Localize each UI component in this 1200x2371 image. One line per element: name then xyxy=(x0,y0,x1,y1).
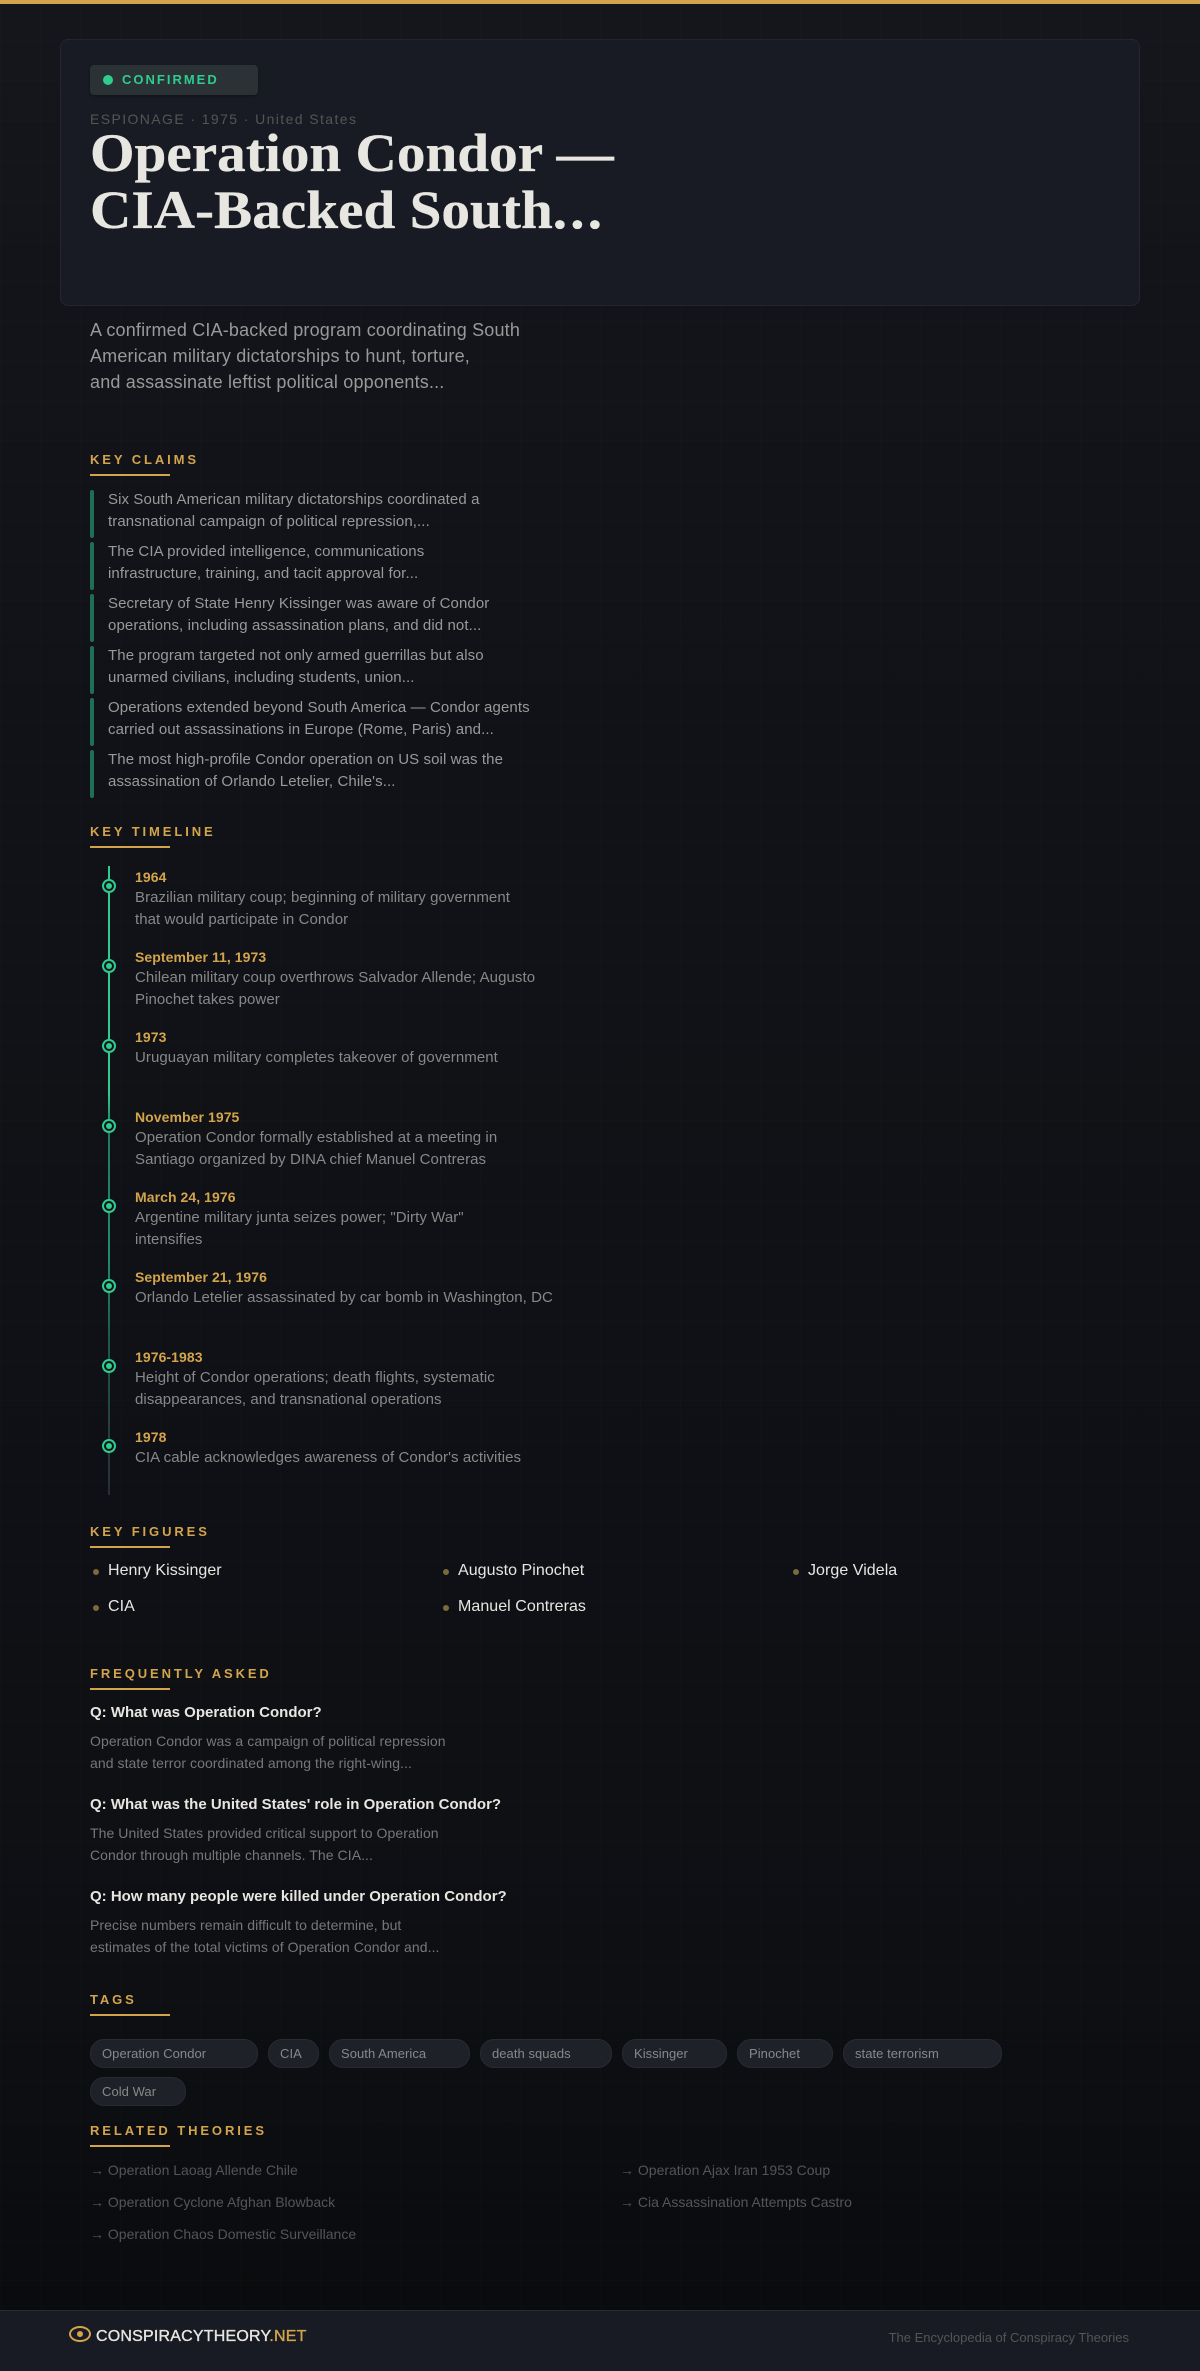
tag xyxy=(90,2077,186,2106)
claim 5 xyxy=(90,698,530,746)
claim 4: unarmed civilians, including students, union... xyxy=(108,669,415,686)
badge label: CONFIRMED xyxy=(122,72,219,87)
FAQ 1: Q: What was Operation Condor? xyxy=(90,1704,322,1721)
claim 5: carried out assassinations in Europe (Rome, Paris) and... xyxy=(108,721,494,738)
icon: status dot xyxy=(103,75,113,85)
heading: key claims: KEY CLAIMS xyxy=(90,452,199,467)
event September 21, 1976: September 21, 1976 xyxy=(135,1269,267,1285)
FAQ 2: Q: What was the United States' role in Operation Condor? xyxy=(90,1796,501,1813)
tags xyxy=(90,2039,1002,2106)
event 1978: 1978 xyxy=(135,1429,166,1445)
FAQ 1: Operation Condor was a campaign of political repression xyxy=(90,1733,446,1749)
tag xyxy=(90,2039,258,2068)
subtitle summary: and assassinate leftist political opponents... xyxy=(90,372,444,392)
event September 11, 1973 xyxy=(102,949,535,1008)
icon: eye pupil xyxy=(77,2331,83,2337)
key figures grid xyxy=(93,1562,898,1615)
event 1964 xyxy=(102,869,510,928)
related link: → Operation Cyclone Afghan Blowback xyxy=(90,2194,335,2210)
FAQ 1 xyxy=(90,1704,446,1771)
tag: Kissinger xyxy=(634,2046,688,2061)
event 1973: 1973 xyxy=(135,1029,166,1045)
claim 4: The program targeted not only armed guerrillas but also xyxy=(108,647,484,664)
event November 1975: November 1975 xyxy=(135,1109,239,1125)
event March 24, 1976: intensifies xyxy=(135,1231,202,1248)
heading: related theories: RELATED THEORIES xyxy=(90,2123,267,2138)
footer xyxy=(0,2310,1200,2371)
tag: Operation Condor xyxy=(102,2046,206,2061)
event March 24, 1976: Argentine military junta seizes power; "Dirty War" xyxy=(135,1209,464,1226)
figure: Manuel Contreras: Manuel Contreras xyxy=(458,1598,586,1615)
claim 6: The most high-profile Condor operation on US soil was the xyxy=(108,751,503,768)
event 1976-1983: Height of Condor operations; death flights, systematic xyxy=(135,1369,495,1386)
event September 11, 1973: September 11, 1973 xyxy=(135,949,266,965)
figure: Henry Kissinger: Henry Kissinger xyxy=(108,1562,222,1579)
event November 1975: Santiago organized by DINA chief Manuel Contreras xyxy=(135,1151,486,1168)
timeline spine xyxy=(108,866,110,1495)
figure: Augusto Pinochet: Augusto Pinochet xyxy=(458,1562,584,1579)
claim 3: Secretary of State Henry Kissinger was aware of Condor xyxy=(108,595,489,612)
subtitle summary: A confirmed CIA-backed program coordinating South xyxy=(90,320,520,340)
tag xyxy=(480,2039,612,2068)
FAQ 3: Q: How many people were killed under Operation Condor? xyxy=(90,1888,507,1905)
tag: CIA xyxy=(280,2046,302,2061)
event September 21, 1976 xyxy=(102,1269,553,1306)
event 1964: Brazilian military coup; beginning of military government xyxy=(135,889,510,906)
event March 24, 1976 xyxy=(102,1189,464,1248)
related link: → Cia Assassination Attempts Castro xyxy=(620,2194,852,2210)
tag: South America xyxy=(341,2046,426,2061)
event September 11, 1973: Pinochet takes power xyxy=(135,991,280,1008)
tag: Cold War xyxy=(102,2084,156,2099)
FAQ 3: Precise numbers remain difficult to determine, but xyxy=(90,1917,401,1933)
FAQ 2 xyxy=(90,1796,501,1863)
subtitle summary: American military dictatorships to hunt, torture, xyxy=(90,346,470,366)
heading: tags: TAGS xyxy=(90,1992,137,2007)
claim 1: transnational campaign of political repression,... xyxy=(108,513,430,530)
title: Operation Condor — xyxy=(90,122,614,182)
panel: key claims list xyxy=(90,490,530,798)
tag: death squads xyxy=(492,2046,571,2061)
footer tagline: The Encyclopedia of Conspiracy Theories xyxy=(889,2330,1129,2345)
tag: state terrorism xyxy=(855,2046,939,2061)
title xyxy=(90,122,614,240)
event September 21, 1976: Orlando Letelier assassinated by car bomb in Washington, DC xyxy=(135,1289,553,1306)
claim 4 xyxy=(90,646,484,694)
badge: confirmed status xyxy=(90,65,258,95)
heading: key timeline: KEY TIMELINE xyxy=(90,824,216,839)
claim 6 xyxy=(90,750,503,798)
related link: → Operation Ajax Iran 1953 Coup xyxy=(620,2162,830,2178)
related link: → Operation Chaos Domestic Surveillance xyxy=(90,2226,356,2242)
FAQ 2: Condor through multiple channels. The CIA... xyxy=(90,1847,373,1863)
title: CIA-Backed South... xyxy=(90,180,605,240)
event 1973: Uruguayan military completes takeover of government xyxy=(135,1049,498,1066)
event 1976-1983: disappearances, and transnational operations xyxy=(135,1391,442,1408)
timeline xyxy=(102,866,553,1495)
event March 24, 1976: March 24, 1976 xyxy=(135,1189,236,1205)
FAQ 3 xyxy=(90,1888,507,1955)
tag xyxy=(268,2039,319,2068)
event 1978 xyxy=(102,1429,521,1466)
subtitle summary xyxy=(90,320,520,392)
claim 5: Operations extended beyond South America — Condor agents xyxy=(108,699,530,716)
tag xyxy=(737,2039,833,2068)
event 1976-1983 xyxy=(102,1349,495,1408)
related theories list xyxy=(90,2162,852,2242)
event 1978: CIA cable acknowledges awareness of Condor's activities xyxy=(135,1449,521,1466)
event 1964: 1964 xyxy=(135,869,166,885)
tag xyxy=(329,2039,470,2068)
claim 1 xyxy=(90,490,480,538)
claim 2: infrastructure, training, and tacit approval for... xyxy=(108,565,418,582)
claim 3 xyxy=(90,594,489,642)
claim 6: assassination of Orlando Letelier, Chile's... xyxy=(108,773,396,790)
figure: Jorge Videla: Jorge Videla xyxy=(808,1562,897,1579)
event November 1975: Operation Condor formally established at a meeting in xyxy=(135,1129,497,1146)
event November 1975 xyxy=(102,1109,497,1168)
claim 1: Six South American military dictatorships coordinated a xyxy=(108,491,480,508)
heading: frequently asked: FREQUENTLY ASKED xyxy=(90,1666,272,1681)
FAQ 2: The United States provided critical support to Operation xyxy=(90,1825,439,1841)
category meta line: ESPIONAGE · 1975 · United States xyxy=(90,111,357,127)
heading: key figures: KEY FIGURES xyxy=(90,1524,210,1539)
event 1973 xyxy=(102,1029,498,1066)
icon: eye logo xyxy=(69,2326,91,2342)
tag: Pinochet xyxy=(749,2046,800,2061)
panel: hero header xyxy=(60,39,1140,306)
event September 11, 1973: Chilean military coup overthrows Salvador Allende; Augusto xyxy=(135,969,535,986)
event 1964: that would participate in Condor xyxy=(135,911,348,928)
event 1976-1983: 1976-1983 xyxy=(135,1349,203,1365)
top accent bar xyxy=(0,0,1200,4)
tag xyxy=(843,2039,1002,2068)
FAQ 1: and state terror coordinated among the right-wing... xyxy=(90,1755,412,1771)
tag xyxy=(622,2039,727,2068)
FAQ 3: estimates of the total victims of Operation Condor and... xyxy=(90,1939,440,1955)
claim 2: The CIA provided intelligence, communications xyxy=(108,543,424,560)
related link: → Operation Laoag Allende Chile xyxy=(90,2162,298,2178)
figure: CIA: CIA xyxy=(108,1598,135,1615)
logo wordmark: CONSPIRACYTHEORY.NET xyxy=(96,2328,307,2345)
claim 2 xyxy=(90,542,424,590)
claim 3: operations, including assassination plans, and did not... xyxy=(108,617,481,634)
